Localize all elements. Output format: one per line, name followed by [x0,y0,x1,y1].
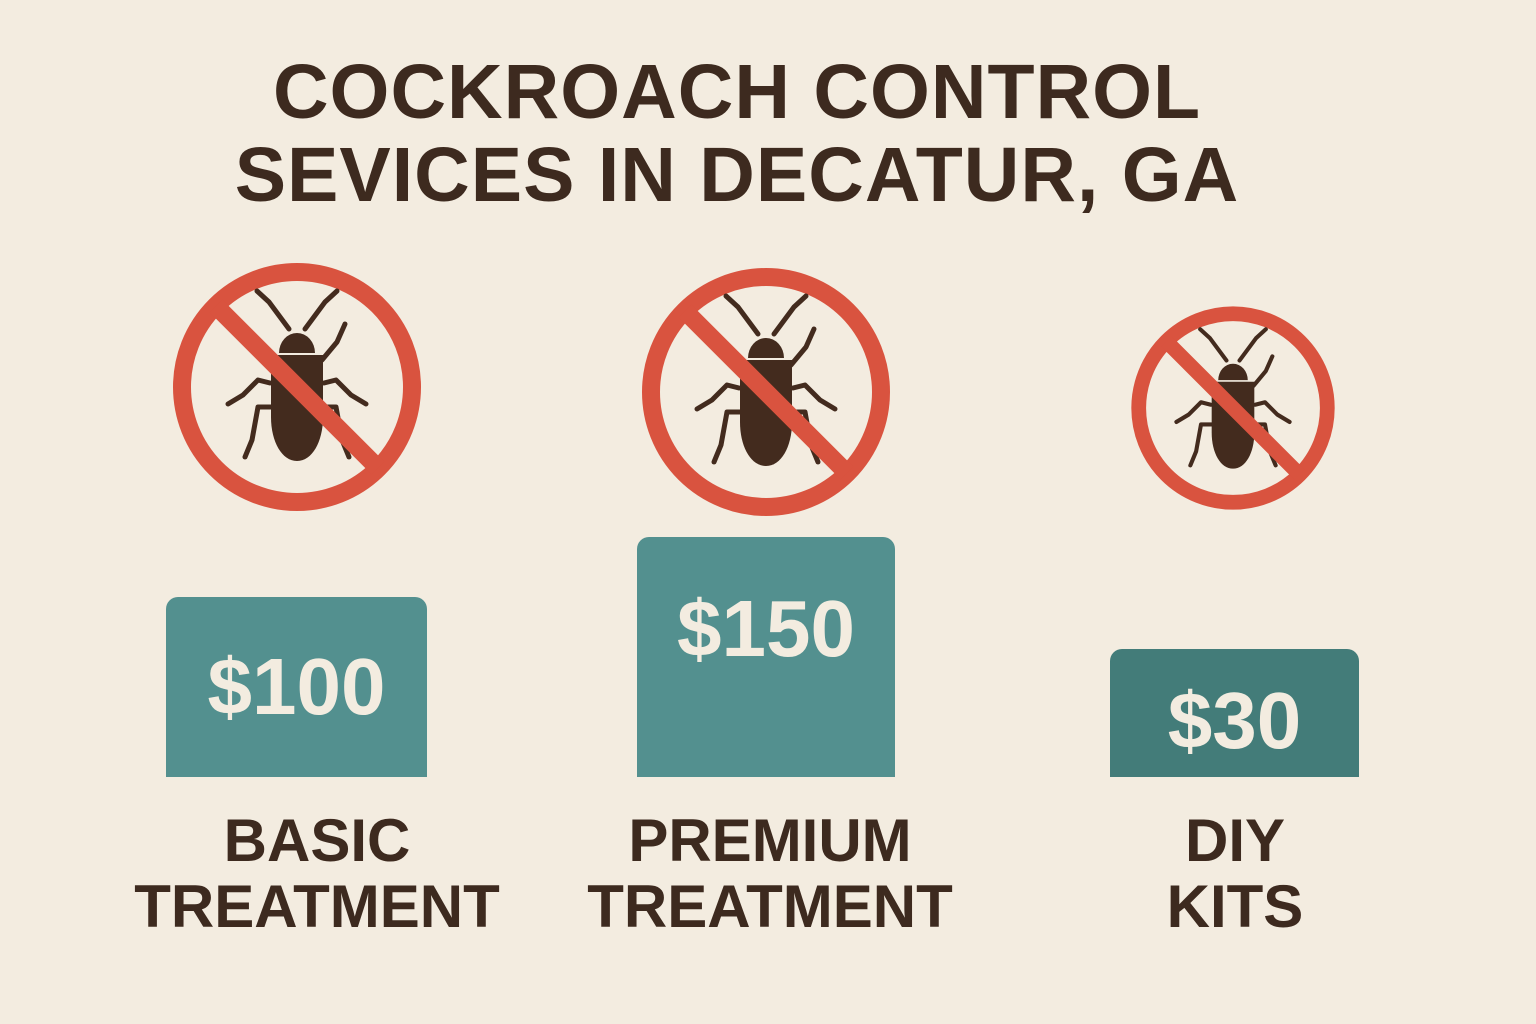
icon: no cockroach DIY [1139,314,1327,502]
title: COCKROACH CONTROL [273,49,1201,135]
label: basic treatment: TREATMENT [134,873,500,940]
label: basic treatment [134,807,500,940]
label: premium treatment: TREATMENT [587,873,953,940]
label: DIY kits [1167,807,1303,940]
label: basic treatment: BASIC [224,807,410,874]
icon: no cockroach basic [182,272,412,502]
bar: basic $100 [166,597,427,777]
title [235,49,1239,218]
label: premium treatment [587,807,953,940]
label: premium treatment: PREMIUM [628,807,912,874]
label: DIY kits: KITS [1167,873,1303,940]
icon: no cockroach premium [651,277,881,507]
bar: premium $150: $150 [677,584,855,673]
bar: basic $100: $100 [208,642,385,731]
title: SEVICES IN DECATUR, GA [235,132,1239,218]
bar: DIY $30 [1110,649,1359,777]
bar: premium $150 [637,537,895,777]
label: DIY kits: DIY [1185,807,1285,874]
bar: DIY $30: $30 [1168,676,1301,765]
